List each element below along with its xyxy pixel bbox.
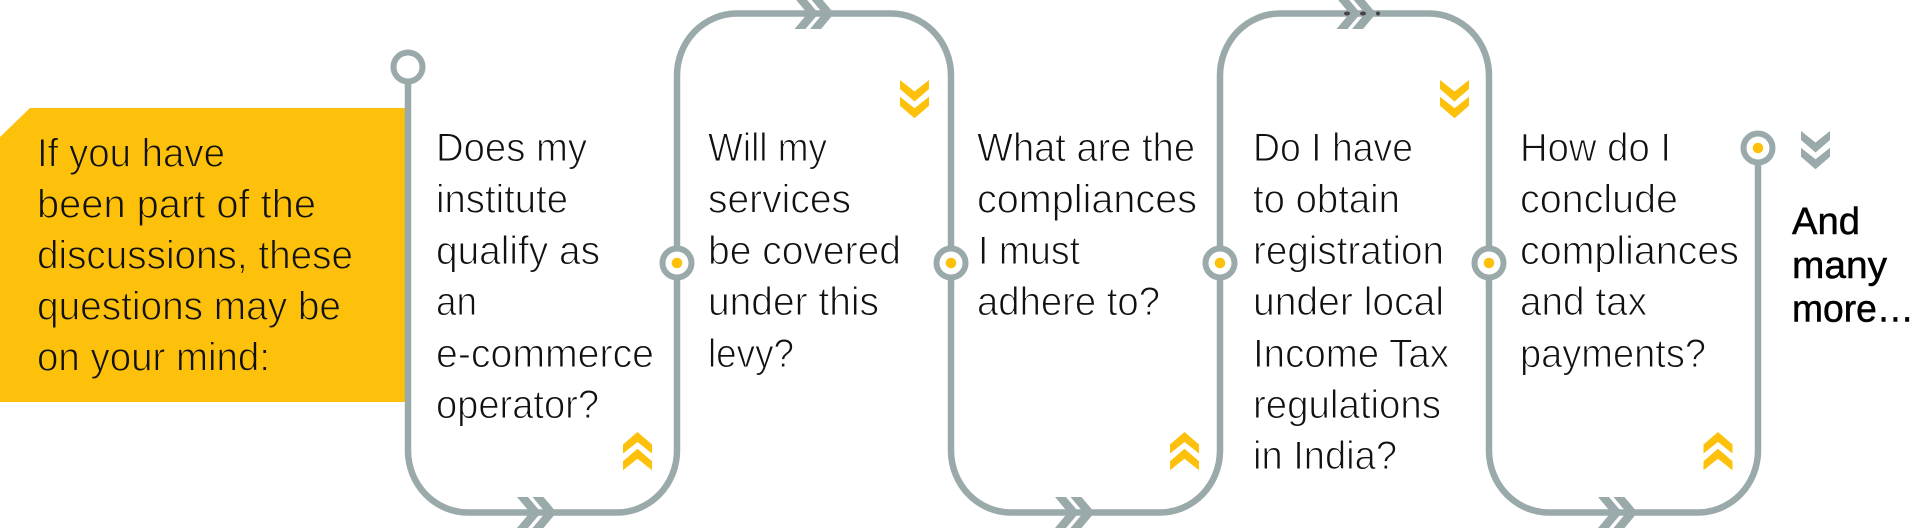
question 5 bbox=[1520, 126, 1739, 376]
question 1: e-commerce bbox=[436, 332, 654, 376]
question 4: under local bbox=[1253, 280, 1444, 324]
question 1: operator? bbox=[436, 383, 599, 427]
intro text: discussions, these bbox=[37, 234, 353, 278]
question 5: How do I bbox=[1520, 126, 1671, 170]
question 4: registration bbox=[1253, 229, 1444, 273]
question 1: institute bbox=[436, 178, 568, 222]
icon: yellow up chevrons 2 bbox=[1170, 432, 1199, 470]
question 3: adhere to? bbox=[977, 280, 1160, 324]
node 3 bbox=[1206, 248, 1234, 278]
node 2 bbox=[936, 248, 966, 278]
icon: yellow down chevrons 2 bbox=[1440, 80, 1469, 118]
arrow: top 1 bbox=[794, 0, 834, 29]
question 4 bbox=[1253, 126, 1449, 478]
closing text: more… bbox=[1792, 288, 1914, 330]
question 2: be covered bbox=[708, 229, 901, 273]
question 2: levy? bbox=[708, 332, 794, 376]
intro text bbox=[37, 132, 353, 380]
intro text: questions may be bbox=[37, 284, 341, 328]
question 1 bbox=[436, 126, 654, 427]
intro text: If you have bbox=[37, 132, 225, 176]
start node bbox=[394, 52, 422, 82]
question 3: compliances bbox=[977, 178, 1197, 222]
icon: yellow down chevrons 1 bbox=[900, 80, 929, 118]
intro text: been part of the bbox=[37, 182, 316, 226]
arrow: bottom 1 bbox=[517, 497, 556, 528]
question 4: in India? bbox=[1253, 434, 1397, 478]
question 5: and tax bbox=[1520, 280, 1647, 324]
closing text bbox=[1792, 201, 1914, 330]
question 1: qualify as bbox=[436, 229, 600, 273]
panel: yellow intro box bbox=[0, 108, 407, 402]
question 3: I must bbox=[978, 229, 1080, 273]
icon: yellow up chevrons 1 bbox=[623, 432, 652, 470]
question 5: compliances bbox=[1520, 229, 1739, 273]
arrow: top 2 bbox=[1336, 0, 1380, 29]
question 2: Will my bbox=[708, 126, 827, 170]
arrow: bottom 2 bbox=[1055, 497, 1094, 528]
question 4: Income Tax bbox=[1253, 332, 1449, 376]
closing text: many bbox=[1792, 245, 1887, 287]
icon: yellow up chevrons 3 bbox=[1704, 432, 1732, 470]
end node bbox=[1744, 134, 1772, 162]
closing text: And bbox=[1792, 201, 1860, 243]
question 3: What are the bbox=[977, 126, 1195, 170]
intro text: on your mind: bbox=[37, 336, 270, 380]
question 1: Does my bbox=[436, 126, 587, 170]
serpentine path line bbox=[408, 14, 1758, 512]
icon: grey down chevrons bbox=[1801, 131, 1830, 169]
node 4 bbox=[1474, 248, 1504, 278]
question 4: to obtain bbox=[1253, 178, 1400, 222]
question 1: an bbox=[436, 280, 477, 324]
question 4: Do I have bbox=[1253, 126, 1413, 170]
arrow: bottom 3 bbox=[1598, 497, 1638, 528]
question 2 bbox=[708, 126, 901, 376]
question 2: under this bbox=[708, 280, 879, 324]
question 3 bbox=[977, 126, 1197, 324]
question 5: payments? bbox=[1520, 332, 1706, 376]
question 4: regulations bbox=[1253, 383, 1441, 427]
question 5: conclude bbox=[1520, 178, 1678, 222]
node 1 bbox=[662, 248, 692, 278]
question 2: services bbox=[708, 178, 851, 222]
